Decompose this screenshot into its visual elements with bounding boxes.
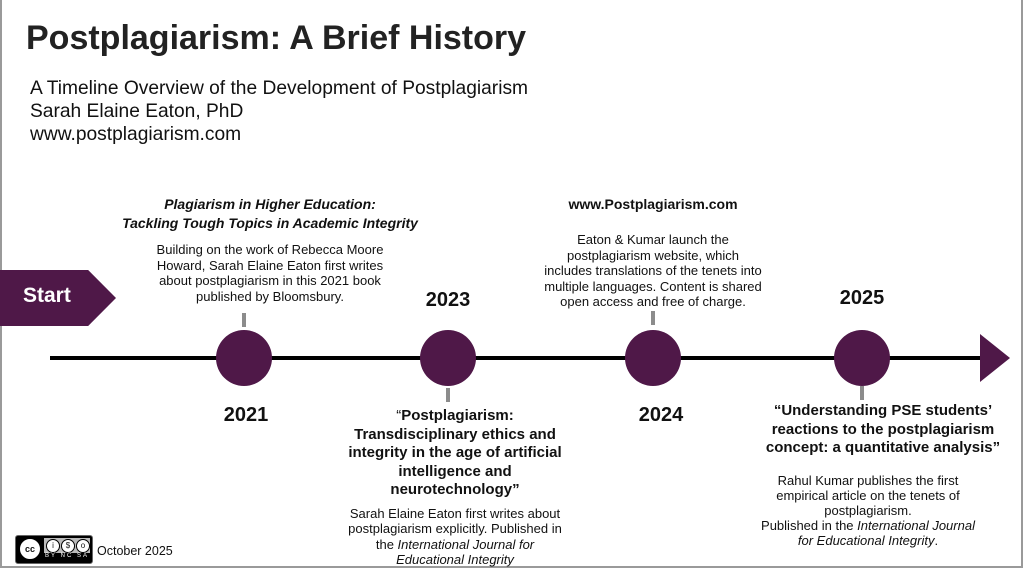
text 2025: “Understanding PSE students’ xyxy=(774,402,992,419)
year 2025: 2025 xyxy=(840,287,884,309)
icon: cc license: cc xyxy=(25,544,35,554)
timeline line xyxy=(50,356,984,360)
text 2024: includes translations of the tenets into xyxy=(544,263,762,278)
subtitle block: A Timeline Overview of the Development of Postplagiarism xyxy=(30,78,528,99)
text 2023: integrity in the age of artificial xyxy=(348,444,562,461)
text 2025 body xyxy=(761,473,976,548)
text 2021: about postplagiarism in this 2021 book xyxy=(159,273,381,288)
text 2023: the International Journal for xyxy=(376,536,534,552)
title: Postplagiarism: A Brief History xyxy=(26,19,526,57)
text 2021: Plagiarism in Higher Education: xyxy=(164,196,376,212)
text 2025 body: Rahul Kumar publishes the first xyxy=(778,473,958,488)
text 2023: intelligence and xyxy=(398,462,512,480)
text 2025: reactions to the postplagiarism xyxy=(772,420,994,438)
text 2021: published by Bloomsbury. xyxy=(196,288,344,304)
subtitle block: Sarah Elaine Eaton, PhD xyxy=(30,101,243,122)
icon: cc license: BY NC SA xyxy=(45,553,89,559)
milestone 2025 xyxy=(834,330,890,400)
text 2024: multiple languages. Content is shared xyxy=(544,278,762,294)
start marker xyxy=(0,270,116,326)
milestone 2023 xyxy=(420,330,476,402)
text 2021: Tackling Tough Topics in Academic Integrity xyxy=(122,215,418,231)
arrow head xyxy=(980,334,1010,382)
subtitle block xyxy=(30,78,528,145)
text 2024 xyxy=(544,196,762,309)
start marker: Start xyxy=(23,284,71,307)
text 2023: postplagiarism explicitly. Published in xyxy=(348,521,562,536)
milestone 2024 xyxy=(625,311,681,386)
text 2023: Educational Integrity xyxy=(396,552,514,567)
text 2025 body: Published in the International Journal xyxy=(761,518,975,533)
icon: cc license: $ xyxy=(66,541,70,550)
text 2023: “Postplagiarism: xyxy=(396,407,514,424)
subtitle block: www.postplagiarism.com xyxy=(30,124,241,145)
text 2023: Transdisciplinary ethics and xyxy=(354,426,556,442)
text 2024: open access and free of charge. xyxy=(560,294,746,309)
year 2024: 2024 xyxy=(639,404,683,426)
year 2023: 2023 xyxy=(426,289,470,311)
text 2024: www.Postplagiarism.com xyxy=(568,196,738,212)
text 2024: postplagiarism website, which xyxy=(567,248,739,262)
text 2021 xyxy=(122,196,418,304)
text 2025 body: for Educational Integrity. xyxy=(798,533,938,548)
icon: cc license xyxy=(15,535,93,564)
text 2025: concept: a quantitative analysis” xyxy=(766,439,1000,456)
milestone 2021 xyxy=(216,313,272,386)
text 2025 xyxy=(766,402,1000,456)
text 2025 body: postplagiarism. xyxy=(824,503,912,518)
year 2021: 2021 xyxy=(224,404,268,426)
icon: cc license: o xyxy=(81,541,85,550)
text 2023 xyxy=(348,407,562,567)
text 2021: Building on the work of Rebecca Moore xyxy=(157,242,383,257)
text 2021: Howard, Sarah Elaine Eaton first writes xyxy=(157,258,383,272)
icon: cc license: i xyxy=(52,541,54,550)
text 2023: Sarah Elaine Eaton first writes about xyxy=(350,506,560,520)
text 2023: neurotechnology” xyxy=(390,481,520,498)
date: October 2025 xyxy=(97,544,173,558)
text 2024: Eaton & Kumar launch the xyxy=(577,232,729,247)
text 2025 body: empirical article on the tenets of xyxy=(776,488,960,503)
